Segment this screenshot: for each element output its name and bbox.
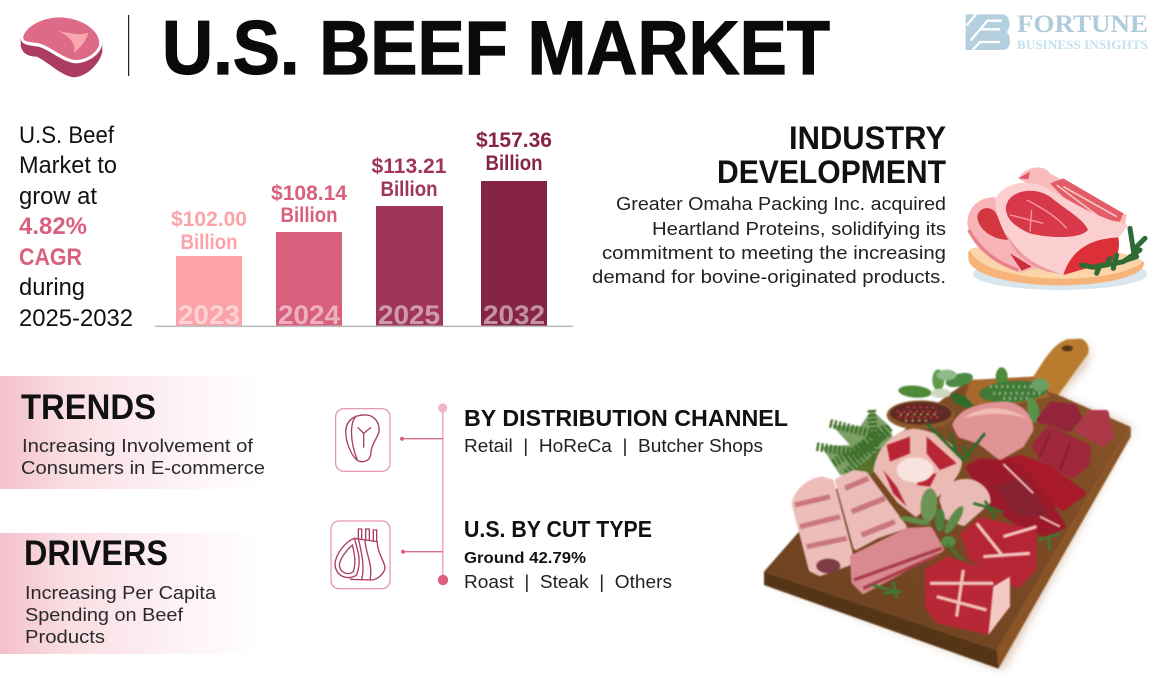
title: U.S. BEEF MARKET <box>162 6 830 91</box>
CAGR statement: 2025-2032 <box>19 305 133 332</box>
CAGR statement: CAGR <box>19 244 82 271</box>
text: industry development <box>592 194 946 287</box>
segment items: Roast | Steak | Others <box>464 572 672 592</box>
header divider <box>128 15 129 76</box>
bar 2023 <box>171 208 247 330</box>
logo tagline: BUSINESS INSIGHTS <box>1017 37 1148 52</box>
heading: industry development: DEVELOPMENT <box>717 154 946 190</box>
logo mark <box>966 14 1010 50</box>
bar 2024: Billion <box>280 204 338 227</box>
bar 2025: Billion <box>380 178 438 201</box>
drivers text <box>25 583 217 647</box>
bar 2023: $102.00 <box>171 208 247 231</box>
bar 2025 <box>372 155 447 330</box>
icon: rack of ribs outline <box>331 521 390 589</box>
drivers text: Products <box>25 627 105 647</box>
bar chart: market size <box>155 129 573 330</box>
CAGR statement: Market to <box>19 152 117 179</box>
CAGR statement: grow at <box>19 183 97 210</box>
text: industry development: Heartland Proteins, solidifying its <box>652 219 946 239</box>
CAGR statement: during <box>19 274 85 301</box>
peppercorn bowl <box>887 400 955 430</box>
CAGR statement: 4.82% <box>19 213 87 240</box>
logo wordmark: FORTUNE <box>1017 11 1148 38</box>
trends text <box>21 436 265 478</box>
illustration: raw steaks on plate <box>967 167 1147 290</box>
segment: by distribution channel <box>464 405 788 456</box>
bar 2032: 2032 <box>483 300 545 330</box>
trends text: Consumers in E-commerce <box>21 458 265 478</box>
header icon: beef steak <box>21 14 102 77</box>
bar 2024 <box>271 182 347 330</box>
panel: trends <box>0 376 265 489</box>
trends heading: TRENDS <box>21 388 156 427</box>
herbs <box>817 367 1049 475</box>
CAGR statement <box>19 122 133 332</box>
bar 2025: $113.21 <box>372 155 447 178</box>
bar 2024: $108.14 <box>271 182 347 205</box>
bar 2032: $157.36 <box>476 129 552 152</box>
drivers text: Increasing Per Capita <box>25 583 217 603</box>
text: industry development: commitment to meeting the increasing <box>602 243 946 263</box>
heading: industry development: INDUSTRY <box>789 120 946 156</box>
illustration: meat cuts on wooden board <box>764 339 1133 670</box>
bar 2023: 2023 <box>178 300 240 330</box>
trends text: Increasing Involvement of <box>22 436 254 456</box>
heading: industry development <box>717 120 946 190</box>
drivers heading: DRIVERS <box>24 534 168 573</box>
segment heading: BY DISTRIBUTION CHANNEL <box>464 405 788 431</box>
segment items: Retail | HoReCa | Butcher Shops <box>464 436 763 456</box>
drivers text: Spending on Beef <box>25 605 184 625</box>
icon: steak outline <box>336 409 390 471</box>
panel: drivers <box>0 533 262 654</box>
bar 2023: Billion <box>180 231 238 254</box>
chart axis <box>155 326 573 327</box>
CAGR statement: U.S. Beef <box>19 122 114 149</box>
leading share: Ground 42.79% <box>464 550 586 567</box>
bar 2032: Billion <box>486 152 542 175</box>
segment: by cut type <box>464 516 672 592</box>
segment heading: U.S. BY CUT TYPE <box>464 516 652 542</box>
bar 2024: 2024 <box>278 300 340 330</box>
segment timeline connector <box>400 403 448 585</box>
cuts <box>955 404 1031 457</box>
logo: Fortune Business Insights <box>966 11 1148 52</box>
bar 2032 <box>476 129 552 330</box>
text: industry development: demand for bovine-originated products. <box>592 267 946 287</box>
garnish <box>899 488 966 547</box>
text: industry development: Greater Omaha Packing Inc. acquired <box>616 194 946 214</box>
bar 2025: 2025 <box>378 300 440 330</box>
